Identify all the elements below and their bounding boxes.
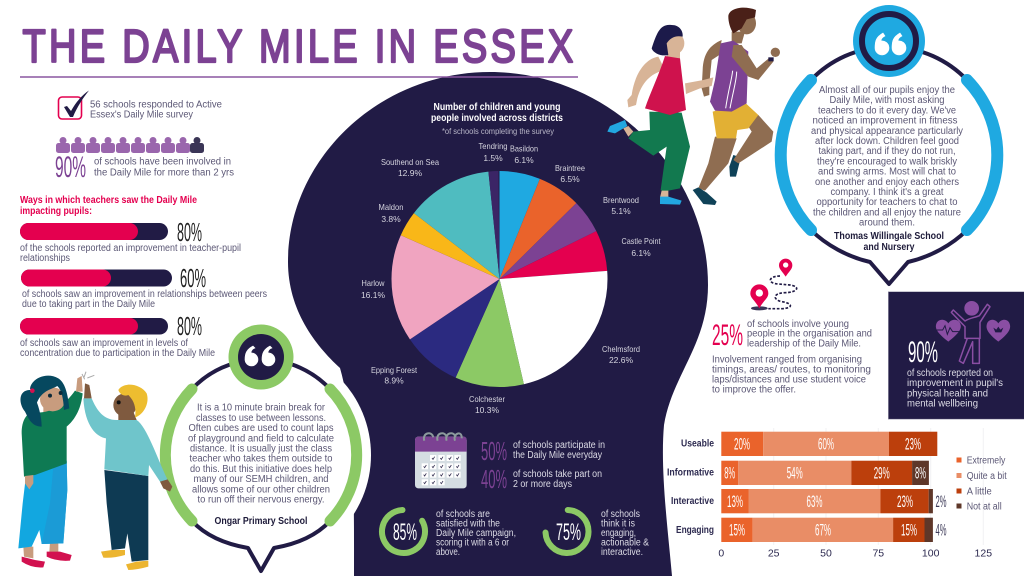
green arcs	[165, 389, 357, 521]
illustration: two children high-fiving	[18, 372, 172, 570]
pie chart panel: children across districts	[361, 102, 661, 415]
white cut-out behind Ongar bubble	[151, 345, 371, 565]
stat: 40% two or more days: of schools take part on	[513, 469, 602, 480]
panel: 90% physical health and wellbeing: 90%	[908, 336, 938, 369]
donut stat: 75% engaging: interactive.	[601, 547, 643, 558]
stat: 90% involved more than 2 years	[55, 137, 234, 184]
chart legend: Quite a bit	[967, 471, 1007, 482]
bubble outline	[811, 47, 967, 284]
icon: quote badge	[853, 5, 925, 77]
chart legend: A little	[967, 486, 992, 498]
progress stat: peers 60%: of schools saw an improvement in relationships between peers	[22, 289, 267, 300]
pie heading	[431, 102, 563, 136]
panel: 90% physical health and wellbeing: physical health and	[907, 388, 988, 399]
row: Useable: 20%	[734, 434, 750, 454]
row: Interactive	[671, 489, 946, 513]
pie labels: 5.1%	[611, 206, 631, 216]
donut stat: 75% engaging: 75%	[556, 519, 581, 546]
row: Engaging: 15%	[729, 520, 745, 540]
quote text: noticed an improvement in fitness	[812, 116, 958, 127]
quote text: Ongar Primary School	[214, 516, 308, 527]
quote text: company. I think it's a great	[830, 187, 944, 198]
quote text: many of our SEMH children, and	[194, 474, 328, 485]
stacked bar chart: campaign ratings: 4%	[936, 520, 946, 540]
pie labels: Colchester	[469, 394, 505, 404]
pie labels: 12.9%	[398, 168, 422, 178]
x axis labels: 100	[922, 548, 940, 560]
heading: ways teachers saw impact: Ways in which teachers saw the Daily Mile	[20, 195, 197, 206]
blue arcs	[781, 80, 997, 230]
panel: 90% physical health and wellbeing: mental wellbeing	[907, 399, 978, 410]
stat: 25% young people involved: Involvement ranged from organising	[712, 355, 862, 366]
stat: 25% young people involved: to improve the offer.	[712, 385, 796, 396]
quote text: taking part, and if they do not run,	[818, 146, 956, 157]
stat: 25% young people involved: of schools involve young	[747, 319, 849, 330]
pie labels: Maldon	[378, 202, 404, 212]
donut stat: 75% engaging: of schools	[601, 509, 640, 520]
progress stat: concentration 80%	[20, 311, 215, 359]
donut stat: 85% satisfied: Daily Mile campaign,	[436, 528, 516, 539]
progress stat: peers 60%: 60%	[180, 263, 206, 293]
donut stat: 85% satisfied: satisfied with the	[436, 519, 500, 530]
pie labels: Tendring	[478, 141, 508, 151]
row: Interactive: 63%	[806, 492, 822, 511]
donut stat: 85% satisfied: of schools are	[436, 509, 490, 520]
pie labels: Brentwood	[603, 195, 639, 205]
title: THE DAILY MILE IN ESSEX	[22, 20, 576, 72]
quote text: of playground and field to calculate	[188, 433, 334, 444]
stacked bar chart: campaign ratings: 2%	[936, 492, 946, 511]
row: Informative: 8%	[724, 464, 735, 482]
quote text: classes to use between lessons.	[196, 413, 326, 424]
pie labels: 1.5%	[483, 153, 503, 163]
quote text: It is a 10 minute brain break for	[197, 403, 326, 414]
heading: ways teachers saw impact	[20, 195, 197, 217]
survey response stat	[58, 90, 222, 120]
row: Informative: 54%	[787, 464, 803, 482]
row: Useable: 23%	[905, 434, 921, 454]
row: Useable	[681, 432, 937, 456]
pie heading: Number of children and young	[434, 102, 560, 113]
pie labels: Epping Forest	[371, 365, 418, 375]
pie labels: Southend on Sea	[381, 157, 439, 167]
row: Interactive: 13%	[727, 492, 743, 511]
quote text: one another and enjoy each others	[815, 177, 959, 188]
stat: 25% young people involved: 25%	[712, 319, 743, 352]
quote text: they're encouraged to walk briskly	[817, 156, 957, 167]
quote text: and physical appearance particularly	[811, 126, 963, 137]
donut stat: 85% satisfied: 85%	[393, 519, 417, 546]
row: Engaging: Engaging	[676, 525, 714, 536]
illustration: two runners	[607, 8, 780, 205]
stat: 50% everyday: of schools participate in	[513, 440, 605, 451]
donut stat: 75% engaging	[545, 509, 649, 558]
progress stat: teacher-pupil 80%: of the schools reported an improvement in teacher-pupil	[20, 243, 241, 254]
icon: route with map pins	[750, 259, 797, 310]
pie labels: Basildon	[510, 144, 538, 154]
stat: 25% young people involved: people in the organisation and	[747, 329, 872, 340]
progress stat: peers 60%	[21, 263, 267, 310]
panel: 90% physical health and wellbeing	[888, 292, 1024, 419]
row: Informative	[667, 461, 929, 485]
quote text: Almost all of our pupils enjoy the	[819, 85, 955, 96]
progress stat: teacher-pupil 80%	[20, 217, 241, 264]
pie heading: *of schools completing the survey	[442, 127, 554, 136]
quote text: Often cubes are used to count laps	[188, 423, 334, 434]
stat: 90% involved more than 2 years: 90%	[55, 151, 86, 184]
survey response stat: Essex's Daily Mile survey	[90, 110, 193, 120]
pie labels: 10.3%	[475, 405, 499, 415]
progress stat: teacher-pupil 80%: relationships	[20, 253, 70, 264]
heading: ways teachers saw impact: impacting pupils:	[20, 206, 92, 217]
quote text: Thomas Willingale School	[834, 231, 944, 242]
quote text: allows some of our other children	[192, 484, 330, 495]
central dark keyhole background	[288, 72, 708, 576]
pie labels: Harlow	[362, 278, 385, 288]
stat: 50% everyday: 50%	[481, 436, 507, 466]
icon row: people pictogram	[56, 137, 204, 153]
stat: 25% young people involved: leadership of the Daily Mile.	[747, 339, 861, 350]
pie labels: 6.5%	[560, 174, 580, 184]
stat: 50% everyday: the Daily Mile everyday	[513, 450, 602, 461]
quote text: distance. It is usually just the class	[190, 444, 332, 454]
stat: 25% young people involved	[712, 319, 872, 396]
quote panel: Thomas Willingale School	[781, 5, 997, 284]
donut stat: 75% engaging: actionable &	[601, 538, 649, 548]
row: Informative: 8%	[915, 464, 926, 482]
pie heading: people involved across districts	[431, 113, 563, 124]
quote text: opportunity for teachers to chat to	[816, 197, 958, 208]
quote text: the children and all enjoy the nature	[813, 207, 961, 218]
stat: 40% two or more days: 2 or more days	[513, 479, 572, 490]
row: Engaging: 15%	[901, 520, 917, 540]
x axis labels: 75	[872, 548, 884, 560]
donut stat: 85% satisfied: above.	[436, 547, 460, 558]
pie labels	[361, 141, 661, 415]
chart legend: Extremely	[967, 456, 1005, 466]
x axis labels: 50	[820, 548, 832, 560]
quote text	[811, 85, 963, 253]
pie labels: 6.1%	[631, 248, 651, 258]
x axis labels: 25	[768, 548, 780, 560]
pie labels: 16.1%	[361, 290, 385, 300]
quote text: and swing arms. Most will chat to	[818, 167, 956, 178]
row: Engaging: 67%	[815, 520, 831, 540]
progress stat: peers 60%: due to taking part in the Daily Mile	[22, 299, 155, 310]
icon: calendar	[415, 433, 467, 488]
quote text: teachers to do it every day. We've	[818, 105, 956, 116]
panel: 90% physical health and wellbeing: of schools reported on	[907, 368, 993, 379]
row: Interactive: Interactive	[671, 496, 714, 507]
progress stat: concentration 80%: concentration due to participation in the Daily Mile	[20, 348, 215, 359]
row: Interactive: 23%	[897, 492, 913, 511]
stat: 90% involved more than 2 years: of schools have been involved in	[94, 156, 231, 168]
pie labels: Braintree	[555, 163, 585, 173]
donut stat: 85% satisfied: scoring it with a 6 or	[436, 538, 510, 548]
quote text: Daily Mile, with most asking	[830, 95, 944, 106]
pie labels: Chelmsford	[602, 344, 640, 354]
stat: 25% young people involved: timings, areas/ routes, to monitoring	[712, 364, 871, 376]
quote text	[188, 403, 334, 527]
quote text: and Nursery	[864, 242, 915, 253]
progress stat: teacher-pupil 80%: 80%	[177, 217, 202, 247]
row: Useable: 60%	[818, 434, 834, 454]
row: Engaging	[676, 518, 946, 542]
bubble outline	[192, 359, 330, 571]
quote text: around them.	[859, 218, 915, 229]
stat: 40% two or more days: 40%	[481, 464, 507, 494]
stacked bar chart: campaign ratings	[667, 428, 1007, 560]
pie labels: 3.8%	[381, 214, 401, 224]
donut stat: 75% engaging: engaging,	[601, 528, 636, 539]
donut stat: 85% satisfied	[374, 502, 516, 561]
pie labels: 6.1%	[514, 155, 534, 165]
row: Informative: Informative	[667, 468, 714, 479]
stat: 50% everyday	[481, 436, 605, 466]
pie labels: 22.6%	[609, 355, 633, 365]
stat: 25% young people involved: laps/distances and use student voice	[712, 374, 866, 386]
quote text: to run off their nervous energy.	[198, 494, 324, 506]
stat: 40% two or more days	[481, 464, 602, 494]
x axis labels: 0	[718, 548, 724, 560]
survey response stat: 56 schools responded to Active	[90, 100, 222, 110]
pie chart	[446, 225, 554, 333]
panel: 90% physical health and wellbeing: improvement in pupil's	[907, 378, 1003, 389]
quote text: teacher who takes them outside to	[190, 454, 333, 465]
progress stat: concentration 80%: 80%	[177, 311, 202, 341]
icon: quote badge	[228, 324, 294, 390]
x axis labels	[718, 548, 992, 560]
row: Informative: 29%	[874, 464, 890, 482]
progress stat: concentration 80%: of schools saw an improvement in levels of	[20, 338, 188, 349]
donut stat: 75% engaging: think it is	[601, 519, 635, 530]
row: Useable: Useable	[681, 439, 714, 450]
quote text: after lock down. Children feel good	[815, 136, 959, 147]
pie labels: 8.9%	[384, 376, 404, 386]
x axis labels: 125	[975, 548, 992, 560]
stat: 90% involved more than 2 years: the Daily Mile for more than 2 yrs	[94, 168, 234, 178]
quote panel: Ongar Primary School	[165, 324, 357, 571]
quote text: do this. But this initiative does help	[190, 464, 332, 475]
pie labels: Castle Point	[622, 236, 661, 246]
chart legend: Not at all	[967, 502, 1002, 512]
chart legend	[956, 456, 1007, 512]
icon: person with hearts	[936, 301, 1010, 363]
icon: checkbox	[58, 90, 89, 119]
